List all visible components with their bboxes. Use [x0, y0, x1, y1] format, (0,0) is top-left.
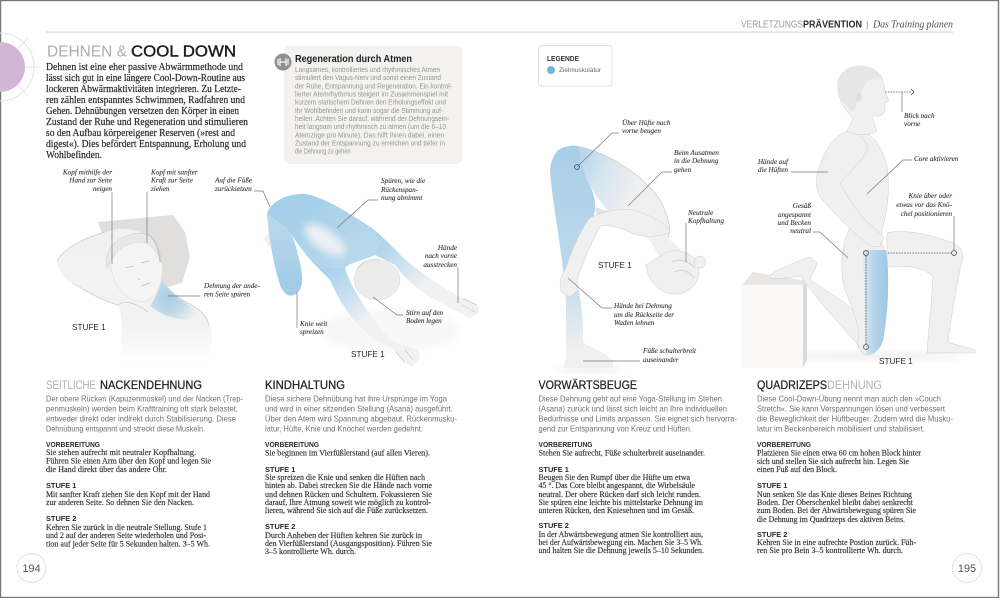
callouts: neck stretch	[62, 168, 260, 299]
title: DEHNEN &	[47, 44, 128, 60]
running header: VERLETZUNGS	[741, 19, 803, 30]
column: Quadrizepsdehnung: die Dehnung im Quadrizeps des aktiven Beins.	[757, 515, 905, 524]
torso	[267, 194, 382, 268]
column: Quadrizepsdehnung: STUFE 1	[757, 481, 787, 490]
panel: Regeneration durch Atmen	[274, 46, 462, 164]
label: Stufe 1 quad stretch: STUFE 1	[879, 357, 913, 366]
callouts: quad stretch: Hände auf	[757, 158, 789, 166]
callouts: child's pose: zurücksetzen	[214, 185, 252, 193]
callouts: forward bend: Waden lehnen	[614, 319, 655, 327]
callouts: child's pose: Boden legen	[406, 317, 442, 325]
intro text: digest«). Dies befördert Entspannung, Erholung und	[46, 139, 247, 150]
column: Kindhaltung: Über den Atem wird Spannung abgebaut. Rückenmusku-	[265, 414, 457, 424]
column: Quadrizepsdehnung: ren Sie pro Bein 3–5 kontrollierte Wh. durch.	[757, 546, 903, 555]
title: COOL DOWN	[131, 44, 236, 60]
column: Quadrizepsdehnung: latur im Beckenbereich mobilisiert und stabilisiert.	[757, 424, 925, 434]
legend: Zielmuskulatur	[559, 67, 602, 74]
column: Kindhaltung: und dehnen Rücken und Schultern. Fokussieren Sie	[265, 490, 432, 499]
panel: Regeneration durch Atmen: stimuliert den Vagus-Nerv und somit einen Zustand	[295, 73, 441, 82]
column: Seitliche Nackendehnung: STUFE 2	[46, 514, 76, 523]
column: Seitliche Nackendehnung: Führen Sie einen Arm über den Kopf und legen Sie	[46, 457, 211, 466]
page number 194	[17, 554, 46, 582]
page number 195: 195	[958, 563, 976, 575]
callouts: child's pose: Hände	[437, 244, 458, 252]
callouts: quad stretch: und Becken	[778, 219, 811, 227]
panel: Regeneration durch Atmen: kurzem statischem Dehnen den Erholungseffekt und	[295, 98, 446, 107]
callouts: neck stretch: Kopf mithilfe der	[62, 168, 112, 176]
top rule	[46, 31, 953, 33]
callouts: forward bend: Beim Ausatmen	[674, 149, 719, 157]
column: Vorwärtsbeuge: bei der Aufwärtsbewegung ein. Machen Sie 3–5 Wh.	[538, 538, 703, 547]
callouts: child's pose: Auf die Füße	[214, 177, 253, 185]
callouts: quad stretch: Gesäß	[793, 202, 811, 210]
callouts: forward bend: Hände bei Dehnung	[613, 302, 672, 310]
column: Vorwärtsbeuge: STUFE 2	[538, 521, 569, 530]
illustration: kneeling quad stretch	[742, 66, 975, 367]
column: Vorwärtsbeuge: (Asana) zurück und lässt sich leicht an Ihre individuellen	[538, 404, 727, 414]
illustration: forward bend	[550, 146, 706, 372]
running header: |	[866, 19, 868, 29]
callouts: quad stretch: Core aktivieren	[914, 155, 959, 163]
callouts: forward bend: um die Rückseite der	[614, 311, 674, 319]
panel: Regeneration durch Atmen: Zustand der Entspannung zu erreichen und tiefer in	[295, 138, 445, 148]
column: Vorwärtsbeuge: neutral. Der obere Rücken darf sich leicht runden.	[538, 490, 701, 499]
column: Vorwärtsbeuge: unteren Rücken, den Kniesehnen und im Gesäß.	[538, 506, 694, 515]
column: Seitliche Nackendehnung: penmuskeln) werden beim Krafttraining oft stark belastet,	[46, 404, 238, 414]
illustration: neck stretch	[57, 215, 212, 364]
running header: Das Training planen	[872, 19, 953, 30]
column: Kindhaltung: VORBEREITUNG	[265, 440, 319, 449]
panel: Regeneration durch Atmen: lierter Atemrhythmus steigert im Zusammenspiel mit	[295, 90, 448, 98]
panel: Regeneration durch Atmen: Langsames, kontrolliertes und rhythmisches Atmen	[295, 65, 440, 74]
panel: Regeneration durch Atmen: Atemzüge pro Minute). Das hilft Ihnen dabei, einen	[295, 130, 444, 139]
column: Kindhaltung: STUFE 1	[265, 465, 295, 474]
label: Stufe 1 neck: STUFE 1	[72, 323, 106, 332]
column: Vorwärtsbeuge: In der Abwärtsbewegung atmen Sie kontrolliert aus,	[538, 530, 703, 539]
column: Seitliche Nackendehnung: SEITLICHE	[46, 379, 96, 392]
running header: PRÄVENTION	[803, 17, 862, 30]
icon: dumbbell	[274, 54, 292, 70]
column: Vorwärtsbeuge: STUFE 1	[538, 465, 569, 474]
callouts: quad stretch: etwas vor das Knö-	[896, 201, 953, 209]
column: Seitliche Nackendehnung: Mit sanfter Kraft ziehen Sie den Kopf mit der Hand	[46, 490, 210, 499]
column: Kindhaltung: lieren, während Sie sich auf die Füße zurücksetzen.	[265, 506, 428, 515]
callouts: neck stretch: Hand zur Seite	[68, 177, 113, 185]
column: Quadrizepsdehnung: Diese Cool-Down-Übung nennt man auch den »Couch	[757, 394, 941, 404]
callouts: child's pose: Knie weit	[299, 320, 328, 328]
intro text: Gehen. Dehnübungen versetzen den Körper in einen	[46, 106, 240, 117]
column: Quadrizepsdehnung: Kehren Sie in eine aufrechte Postion zurück. Füh-	[757, 538, 916, 547]
callouts: quad stretch	[757, 89, 959, 349]
column: Quadrizepsdehnung	[757, 379, 953, 555]
callouts: child's pose: spreizen	[300, 328, 324, 336]
column: Kindhaltung: latur, Hüfte, Knie und Knöchel werden gedehnt.	[265, 424, 423, 434]
column: Kindhaltung: Sie beginnen im Vierfüßlerstand (auf allen Vieren).	[265, 449, 430, 458]
column: Seitliche Nackendehnung: STUFE 1	[46, 481, 76, 490]
label: Stufe 1 forward bend: STUFE 1	[598, 261, 632, 270]
callouts: child's pose	[214, 177, 458, 336]
callouts: quad stretch: vorne	[904, 120, 921, 128]
column: Kindhaltung: und wird in einer sitzenden Stellung (Asana) ausgeführt.	[265, 404, 453, 414]
column: Seitliche Nackendehnung: Dehnübung entspannt und streckt diese Muskeln.	[46, 424, 205, 434]
column: Quadrizepsdehnung: Nun senken Sie das Knie dieses Beines Richtung	[757, 490, 912, 499]
column: Vorwärtsbeuge: VORBEREITUNG	[538, 440, 593, 449]
callouts: quad stretch: Blick nach	[904, 112, 935, 120]
column: Quadrizepsdehnung: Boden. Der Oberschenkel bleibt dabei senkrecht	[757, 498, 914, 507]
column: Seitliche Nackendehnung: Sie stehen aufrecht mit neutraler Kopfhaltung.	[46, 448, 196, 457]
page number 194: 194	[22, 563, 41, 575]
right arm	[372, 228, 479, 318]
column: Seitliche Nackendehnung: und 2 auf der anderen Seite wiederholen und Posi-	[46, 531, 206, 540]
panel: Regeneration durch Atmen: Ihr Wohlbefinden und kann sogar die Stimmung auf-	[295, 106, 443, 115]
intro text	[46, 62, 249, 161]
column: Seitliche Nackendehnung: tion auf jeder Seite für 5 Sekunden halten. 3–5 Wh.	[46, 540, 210, 549]
column: Kindhaltung: den Vierfüßlerstand (Ausgangsposition). Führen Sie	[265, 539, 432, 548]
column: Vorwärtsbeuge: Diese Dehnung geht auf eine Yoga-Stellung im Stehen	[538, 394, 722, 404]
callouts: neck stretch: neigen	[93, 185, 112, 193]
column: Kindhaltung: Durch Anheben der Hüften kehren Sie zurück in	[265, 531, 422, 540]
column: Vorwärtsbeuge: Beugen Sie den Rumpf über die Hüfte um etwa	[538, 473, 690, 482]
callouts: child's pose: nung abnimmt	[381, 194, 423, 202]
column: Quadrizepsdehnung: STUFE 2	[757, 530, 787, 539]
column: Vorwärtsbeuge: und halten Sie die Dehnung jeweils 5–10 Sekunden.	[538, 546, 704, 555]
callouts: forward bend: Über Hüfte nach	[622, 118, 671, 127]
callouts: quad stretch: die Hüften	[758, 166, 788, 174]
column: Kindhaltung: hinten ab. Dabei strecken Sie die Hände nach vorne	[265, 481, 432, 490]
label: Stufe 1 child's pose: STUFE 1	[351, 350, 385, 359]
block	[742, 272, 807, 367]
column: Seitliche Nackendehnung: NACKENDEHNUNG	[100, 379, 202, 392]
callouts: child's pose: nach vorne	[425, 252, 458, 260]
column: Kindhaltung: Diese sichere Dehnübung hat ihre Ursprünge im Yoga	[265, 394, 447, 404]
column: Seitliche Nackendehnung: die Hand direkt über das andere Ohr.	[46, 465, 167, 474]
callouts: child's pose: Rückenspan-	[380, 186, 419, 194]
column: Seitliche Nackendehnung: Der obere Rücken (Kapuzenmuskel) und der Nacken (Trep-	[46, 394, 243, 404]
callouts: neck stretch: Kraft zur Seite	[150, 177, 194, 185]
column: Seitliche Nackendehnung: Kehren Sie zurück in die neutrale Stellung. Stufe 1	[46, 523, 207, 532]
intro text: Zustand der Ruhe und Regeneration und stimulieren	[46, 117, 249, 128]
column: Quadrizepsdehnung: VORBEREITUNG	[757, 440, 811, 449]
column: Quadrizepsdehnung: QUADRIZEPS	[757, 379, 827, 392]
column: Seitliche Nackendehnung: VORBEREITUNG	[46, 440, 100, 449]
panel: Regeneration durch Atmen: der Ruhe, Entspannung und Regeneration. Ein kontrol-	[295, 81, 452, 90]
callouts: child's pose: ausstrecken	[423, 261, 457, 269]
callouts: child's pose: Stirn auf den	[406, 309, 444, 317]
column: Kindhaltung: KINDHALTUNG	[265, 379, 345, 392]
intro text: so den Aufbau körpereigener Reserven (»rest and	[46, 128, 236, 139]
column: Quadrizepsdehnung: Platzieren Sie einen etwa 60 cm hohen Block hinter	[757, 449, 921, 458]
intro text: lässt sich gut in eine längere Cool-Down-Routine aus	[46, 73, 245, 84]
callouts: quad stretch: angespannt	[778, 211, 812, 219]
column: Seitliche Nackendehnung	[46, 379, 243, 549]
callouts: quad stretch: neutral	[790, 227, 811, 235]
left arm	[318, 268, 420, 367]
callouts: forward bend: in die Dehnung	[674, 157, 719, 165]
panel: Regeneration durch Atmen: die Dehnung zu gehen.	[295, 147, 352, 156]
column: Seitliche Nackendehnung: entweder direkt oder indirekt durch Stabilisierung. Diese	[46, 414, 236, 424]
intro text: Wohlbefinden.	[46, 150, 102, 161]
legend: LEGENDE	[547, 54, 579, 63]
column: Quadrizepsdehnung: zum Boden. Bei der Abwärtsbewegung spüren Sie	[757, 506, 916, 515]
callouts: quad stretch: Knie über oder	[907, 192, 952, 200]
panel: Regeneration durch Atmen: Regeneration durch Atmen	[295, 54, 412, 65]
panel: Regeneration durch Atmen: heit langsam und rhythmisch zu atmen (um die 6–10	[295, 122, 446, 131]
column: Vorwärtsbeuge: Sie spüren eine leichte bis mittelstarke Dehnung im	[538, 498, 704, 507]
callouts: forward bend: auseinander	[643, 356, 679, 364]
callouts: neck stretch: ziehen	[150, 185, 170, 193]
callouts: neck stretch: ren Seite spüren	[204, 291, 251, 299]
callouts: quad stretch: chel positionieren	[901, 210, 952, 218]
running header	[741, 17, 953, 30]
intro text: lockeren Abwärmaktivitäten integrieren. Zu Letzte-	[46, 84, 241, 95]
column: Quadrizepsdehnung: die Beweglichkeit der Hüftbeuger. Zudem wird die Musku-	[757, 414, 953, 424]
column: Kindhaltung: darauf, Ihre Atmung soweit wie möglich zu kontrol-	[265, 498, 431, 507]
column: Quadrizepsdehnung: DEHNUNG	[827, 379, 882, 392]
callouts: forward bend: Füße schulterbreit	[642, 347, 697, 355]
column: Kindhaltung	[265, 379, 457, 556]
page number 195	[952, 554, 982, 582]
column: Vorwärtsbeuge: Stehen Sie aufrecht, Füße schulterbreit auseinander.	[538, 449, 705, 458]
section marker: purple disc	[0, 33, 40, 101]
panel: Regeneration durch Atmen: hellen. Achten Sie darauf, während der Dehnungsein-	[295, 114, 450, 123]
column: Kindhaltung: 3–5 kontrollierte Wh. durch.	[265, 547, 356, 556]
callouts: neck stretch: Kopf mit sanfter	[150, 168, 198, 176]
callouts: neck stretch: Dehnung der ande-	[203, 282, 260, 290]
column: Quadrizepsdehnung: Stretch«. Sie kann Verspannungen lösen und verbessert	[757, 404, 946, 414]
callouts: forward bend: Neutrale	[687, 209, 714, 217]
intro text: ren zählen entspanntes Schwimmen, Radfahren und	[46, 95, 246, 106]
callouts: forward bend: vorne beugen	[622, 127, 661, 135]
callouts: forward bend	[568, 118, 724, 364]
title	[47, 44, 236, 60]
column: Quadrizepsdehnung: sich und stellen Sie sich aufrecht hin. Legen Sie	[757, 457, 909, 466]
callouts: child's pose: Spüren, wie die	[381, 177, 426, 185]
column: Vorwärtsbeuge	[538, 379, 737, 555]
intro text: Dehnen ist eine eher passive Abwärmmethode und	[46, 62, 244, 73]
column: Seitliche Nackendehnung: zur anderen Seite. So dehnen Sie den Nacken.	[46, 498, 194, 507]
illustration: child's pose	[264, 194, 479, 367]
callouts: forward bend: Kopfhaltung	[687, 217, 724, 225]
column: Vorwärtsbeuge: 45 °. Das Core bleibt angespannt, die Wirbelsäule	[538, 481, 695, 490]
column: Kindhaltung: Sie spreizen die Knie und senken die Hüften nach	[265, 473, 425, 482]
callouts: forward bend: gehen	[674, 166, 692, 174]
column: Quadrizepsdehnung: einen Fuß auf den Block.	[757, 465, 837, 474]
legend	[538, 46, 612, 86]
column: Kindhaltung: STUFE 2	[265, 522, 295, 531]
column: Vorwärtsbeuge: VORWÄRTSBEUGE	[538, 379, 637, 392]
column: Vorwärtsbeuge: Bedürfnisse und Limits anpassen. Sie eignet sich hervorra-	[538, 414, 737, 424]
column: Vorwärtsbeuge: gend zur Entspannung von Kreuz und Hüften.	[538, 424, 692, 434]
